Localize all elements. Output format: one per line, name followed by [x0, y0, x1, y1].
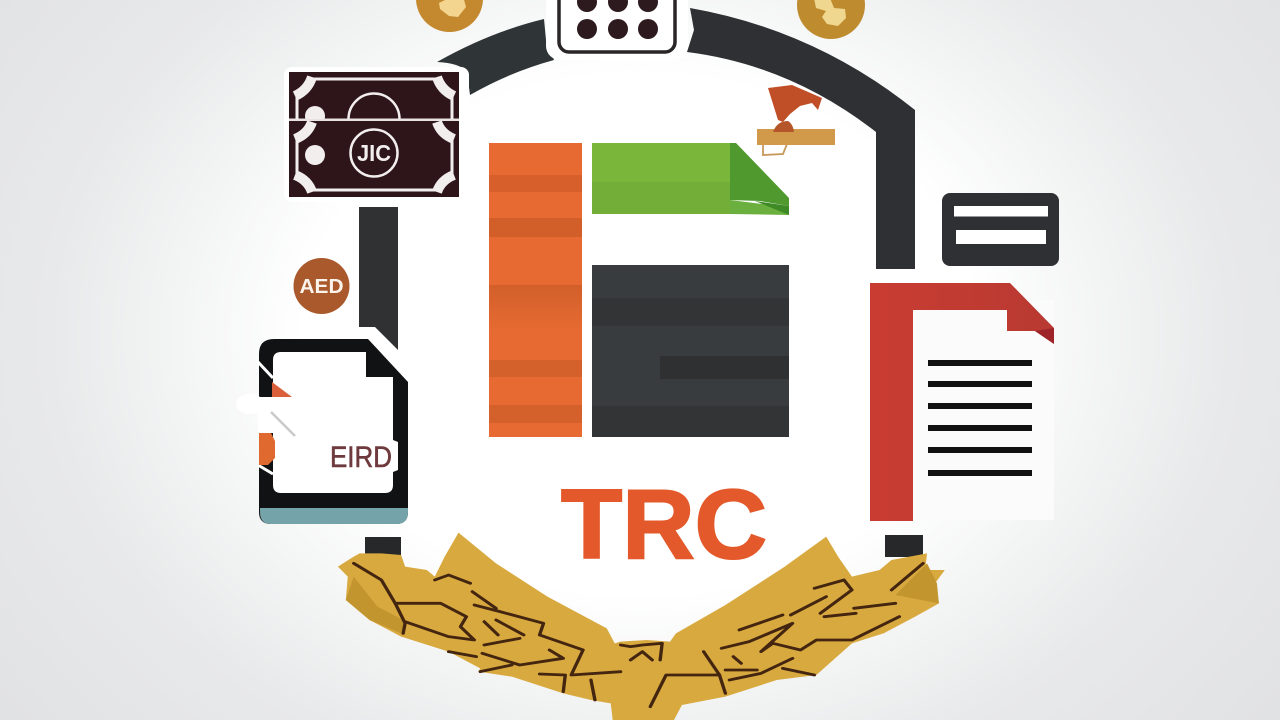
icon: memory card with EIRD label	[236, 339, 408, 524]
icon: banknotes: JIC	[357, 140, 391, 166]
dark ring: lower right stub	[885, 535, 923, 557]
icon: right gold coin	[797, 0, 865, 39]
icon: golden eagle	[338, 533, 945, 720]
icon: menu card	[942, 193, 1059, 266]
icon: left gold coin	[416, 0, 483, 32]
dark ring: left vertical segment	[359, 207, 398, 350]
icon: document with red fold	[870, 283, 1054, 521]
panel: dark charcoal block	[592, 265, 789, 437]
panel: green folded tab	[592, 143, 789, 215]
icon: dice tile	[546, 0, 688, 60]
icon: gavel	[757, 85, 835, 155]
title: TRC: TRC	[561, 469, 767, 579]
document text lines	[928, 360, 1032, 476]
dark ring: upper left arc	[437, 19, 554, 95]
eagle feather cracks	[354, 563, 923, 707]
eagle wing tip shading	[346, 563, 939, 635]
icon: banknotes	[284, 67, 469, 202]
icon: AED coin: AED	[300, 276, 344, 298]
dark ring: lower left stub	[365, 537, 401, 557]
dark ring: upper right arc	[687, 8, 915, 269]
panel: orange column	[489, 143, 582, 437]
icon: memory card with EIRD label: EIRD	[330, 441, 392, 474]
icon: AED coin	[294, 258, 350, 314]
